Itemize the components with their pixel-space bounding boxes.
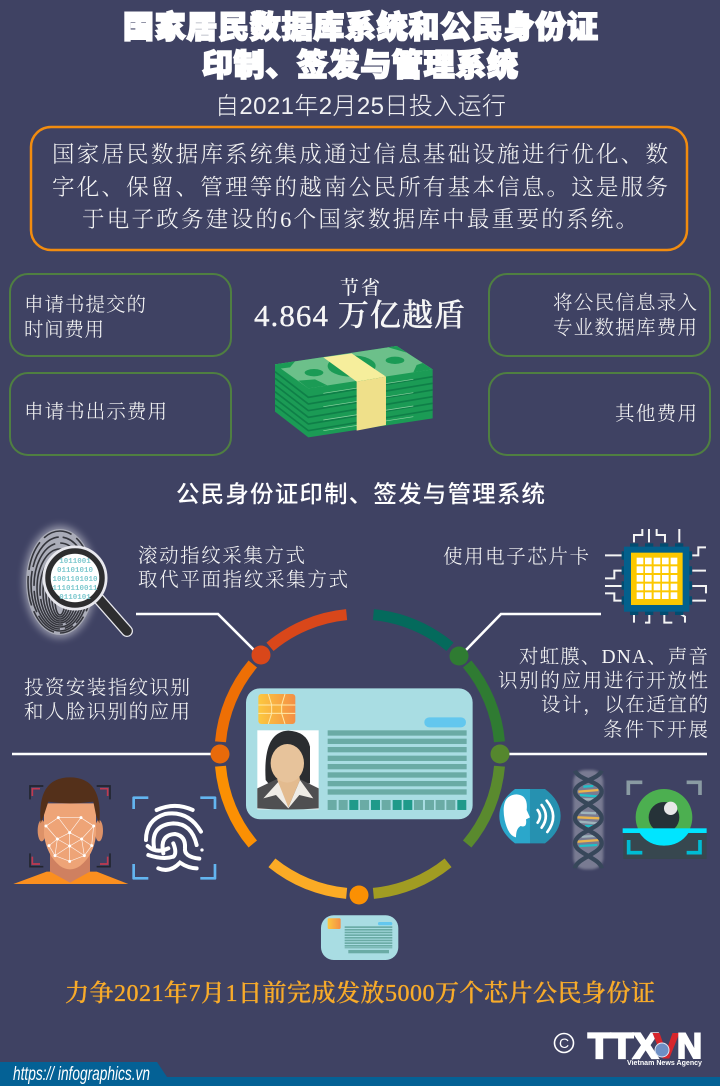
icon: fingerprint with magnifying glass: 1001101010 xyxy=(52,576,98,584)
icon: DNA helix xyxy=(573,770,603,869)
title xyxy=(123,10,598,83)
text: rolled fingerprint capture: 取代平面指纹采集方式 xyxy=(138,569,348,591)
icon: fingerprint with magnifying glass: 0110101 xyxy=(59,594,91,602)
subtitle: start date: 自2021年2月25日投入运行 xyxy=(215,93,506,120)
text: rolled fingerprint capture: 滚动指纹采集方式 xyxy=(138,545,305,567)
panel: intro xyxy=(31,127,687,250)
panel: application submission time cost: 时间费用 xyxy=(24,319,104,341)
icon: small chip card xyxy=(321,915,398,960)
panel: data entry cost xyxy=(489,274,710,356)
panel: intro: 国家居民数据库系统集成通过信息基础设施进行优化、数 xyxy=(52,142,668,167)
text: fingerprint and face recognition: 投资安装指纹识别 xyxy=(24,677,190,699)
footer band with website xyxy=(0,1062,720,1086)
icon: iris scanner xyxy=(623,782,707,859)
ring nodes xyxy=(210,646,510,904)
heading: system: 公民身份证印制、签发与管理系统 xyxy=(176,481,545,507)
panel: intro: 字化、保留、管理等的越南公民所有基本信息。这是服务 xyxy=(52,175,668,200)
callout: target: 力争2021年7月1日前完成发放5000万个芯片公民身份证 xyxy=(65,980,655,1007)
panel: application submission time cost xyxy=(10,274,231,356)
panel: other costs xyxy=(489,373,710,455)
text: iris, DNA, voice recognition: 设计，以在适宜的 xyxy=(541,694,708,716)
icon: fingerprint with magnifying glass: 1110110011 xyxy=(52,585,98,593)
savings figure xyxy=(254,276,465,333)
logo: TTXVN: Vietnam News Agency xyxy=(627,1058,703,1067)
text: electronic chip card: 使用电子芯片卡 xyxy=(443,546,589,568)
portrait photo xyxy=(257,730,319,809)
footer band with website: https:// infographics.vn xyxy=(13,1064,150,1085)
text: fingerprint and face recognition: 和人脸识别的应用 xyxy=(24,701,190,723)
panel: data entry cost: 将公民信息录入 xyxy=(553,292,697,314)
icon: citizen ID card xyxy=(246,688,473,819)
title: 国家居民数据库系统和公民身份证 xyxy=(123,10,598,45)
logo: TTXVN xyxy=(554,1027,703,1067)
panel: application presentation cost: 申请书出示费用 xyxy=(24,401,167,423)
savings figure: 节省 xyxy=(340,276,381,299)
logo: TTXVN: C xyxy=(559,1035,569,1051)
text: iris, DNA, voice recognition xyxy=(498,646,708,741)
icon: voice recognition xyxy=(499,789,561,843)
text: iris, DNA, voice recognition: 条件下开展 xyxy=(603,719,708,741)
text: fingerprint and face recognition xyxy=(24,677,190,723)
icon: fingerprint with magnifying glass xyxy=(24,526,127,638)
logo: TTXVN: N xyxy=(677,1027,702,1066)
icon: microchip xyxy=(605,529,706,623)
text: iris, DNA, voice recognition: 对虹膜、DNA、声音 xyxy=(519,646,708,668)
icon: fingerprint with magnifying glass: 1011001 xyxy=(59,558,91,566)
icon: fingerprint with magnifying glass: 01101010 xyxy=(57,567,93,575)
ring of arc segments xyxy=(220,615,500,893)
panel: other costs: 其他费用 xyxy=(615,403,697,425)
text: iris, DNA, voice recognition: 识别的应用进行开放性 xyxy=(498,670,708,692)
connector lines xyxy=(12,614,707,754)
icon: face recognition xyxy=(13,777,128,884)
chip on card xyxy=(258,694,295,724)
title: 印制、签发与管理系统 xyxy=(202,48,518,83)
logo: TTXVN: V xyxy=(653,1027,680,1066)
icon: stack of banknotes xyxy=(275,346,433,437)
savings figure: 4.864 万亿越盾 xyxy=(254,298,465,333)
panel: intro: 于电子政务建设的6个国家数据库中最重要的系统。 xyxy=(82,207,638,232)
panel: application presentation cost xyxy=(10,373,231,455)
panel: application submission time cost: 申请书提交的 xyxy=(24,294,146,316)
icon: fingerprint scan xyxy=(134,798,215,878)
panel: data entry cost: 专业数据库费用 xyxy=(553,317,697,339)
text: rolled fingerprint capture xyxy=(138,545,348,591)
logo: TTXVN: TTX xyxy=(588,1027,659,1066)
